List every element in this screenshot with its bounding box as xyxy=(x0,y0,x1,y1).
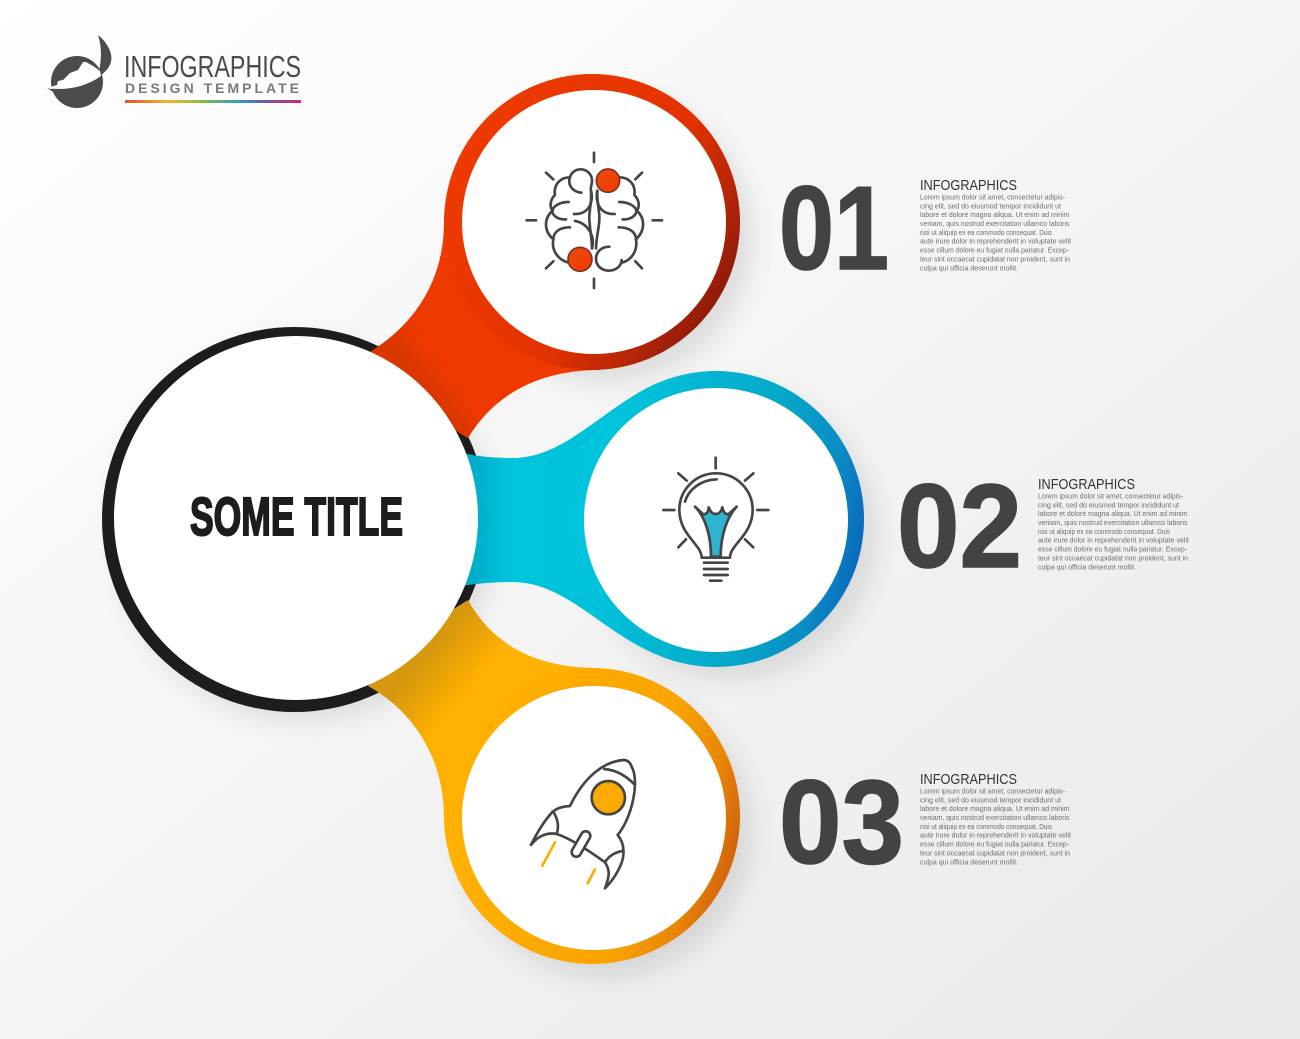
body 1: teur sint occaecat cupidatat non proident, sunt in xyxy=(920,254,1070,263)
white disc: yellow xyxy=(462,686,726,950)
body 1: labore et dolore magna aliqua. Ut enim ad minim xyxy=(920,210,1070,219)
body 3: labore et dolore magna aliqua. Ut enim ad minim xyxy=(920,804,1070,813)
panel: step 2 xyxy=(568,371,864,667)
body 1: cing elit, sed do eiusmod tempor incididunt ut xyxy=(920,201,1061,210)
body 1: nisi ut aliquip ex ea commodo consequat. Duis xyxy=(920,228,1052,237)
body 3: Lorem ipsum dolor sit amet, consectetur adipis- xyxy=(920,786,1065,796)
body 2: Lorem ipsum dolor sit amet, consectetur adipis- xyxy=(1038,492,1183,500)
brain dot: top right xyxy=(596,169,620,192)
body 3 xyxy=(920,786,1071,866)
connector: red xyxy=(368,222,600,438)
body 1: culpa qui officia deserunt mollit. xyxy=(920,263,1018,272)
body 2: nisi ut aliquip ex ea commodo consequat. Duis xyxy=(1038,527,1170,536)
white disc: blue xyxy=(584,388,848,652)
body 2 xyxy=(1038,492,1189,571)
heading 2: INFOGRAPHICS xyxy=(1038,477,1135,493)
icon: brain xyxy=(527,153,662,288)
body 3: veniam, quis nostrud exercitation ullamco laboris xyxy=(920,813,1070,822)
soft shadows under circles xyxy=(114,90,876,978)
central circle ring xyxy=(102,327,487,712)
panel: step 1 xyxy=(444,74,740,370)
logo subtitle: DESIGN TEMPLATE xyxy=(125,80,299,96)
body 1 xyxy=(920,192,1071,272)
body 2: esse cillum dolore eu fugiat nulla pariatur. Excep- xyxy=(1038,545,1187,554)
heading 1: INFOGRAPHICS xyxy=(920,178,1017,194)
bulb filament xyxy=(695,507,737,557)
text block 2 xyxy=(1038,477,1189,571)
body 3: culpa qui officia deserunt mollit. xyxy=(920,857,1018,866)
connector: yellow xyxy=(368,600,600,817)
body 3: teur sint occaecat cupidatat non proident, sunt in xyxy=(920,848,1070,857)
body 1: veniam, quis nostrud exercitation ullamco laboris xyxy=(920,219,1070,228)
number 01: 01 xyxy=(779,162,889,295)
heading 3: INFOGRAPHICS xyxy=(920,772,1017,788)
body 1: aute irure dolor in reprehenderit in voluptate velit xyxy=(920,237,1071,246)
ring: blue xyxy=(568,371,864,667)
body 2: veniam, quis nostrud exercitation ullamco laboris xyxy=(1038,518,1188,527)
body 1: Lorem ipsum dolor sit amet, consectetur adipis- xyxy=(920,192,1065,202)
number 02: 02 xyxy=(897,460,1022,593)
panel: step 3 xyxy=(444,668,740,964)
body 2: cing elit, sed do eiusmod tempor incididunt ut xyxy=(1038,500,1179,509)
logo xyxy=(47,35,301,108)
main title: SOME TITLE xyxy=(190,487,403,547)
rocket exhaust xyxy=(542,842,595,883)
body 2: culpa qui officia deserunt mollit. xyxy=(1038,562,1136,571)
body 2: aute irure dolor in reprehenderit in voluptate velit xyxy=(1038,536,1189,545)
rainbow bar xyxy=(125,100,301,103)
ring: red xyxy=(444,74,740,370)
rocket body xyxy=(531,760,635,888)
body 2: teur sint occaecat cupidatat non proident, sunt in xyxy=(1038,553,1188,562)
brain dot: bottom left xyxy=(568,247,592,271)
rocket window xyxy=(592,781,625,814)
body 3: nisi ut aliquip ex ea commodo consequat. Duis xyxy=(920,822,1052,831)
connector: blue xyxy=(462,384,700,654)
body 3: cing elit, sed do eiusmod tempor incididunt ut xyxy=(920,795,1061,804)
body 3: aute irure dolor in reprehenderit in voluptate velit xyxy=(920,831,1071,840)
white disc: red xyxy=(462,90,726,354)
number 03: 03 xyxy=(779,756,904,889)
body 1: esse cillum dolore eu fugiat nulla pariatur. Excep- xyxy=(920,246,1069,255)
bulb outline xyxy=(663,458,768,581)
logo title: INFOGRAPHICS xyxy=(124,49,301,84)
icon: rocket xyxy=(531,760,635,888)
text block 3 xyxy=(920,772,1071,866)
body 2: labore et dolore magna aliqua. Ut enim ad minim xyxy=(1038,509,1188,518)
body 3: esse cillum dolore eu fugiat nulla pariatur. Excep- xyxy=(920,840,1069,849)
ring: yellow xyxy=(444,668,740,964)
central white circle xyxy=(114,336,478,700)
logo mark xyxy=(47,35,111,108)
icon: light bulb xyxy=(663,458,768,581)
text block 1 xyxy=(920,178,1071,272)
